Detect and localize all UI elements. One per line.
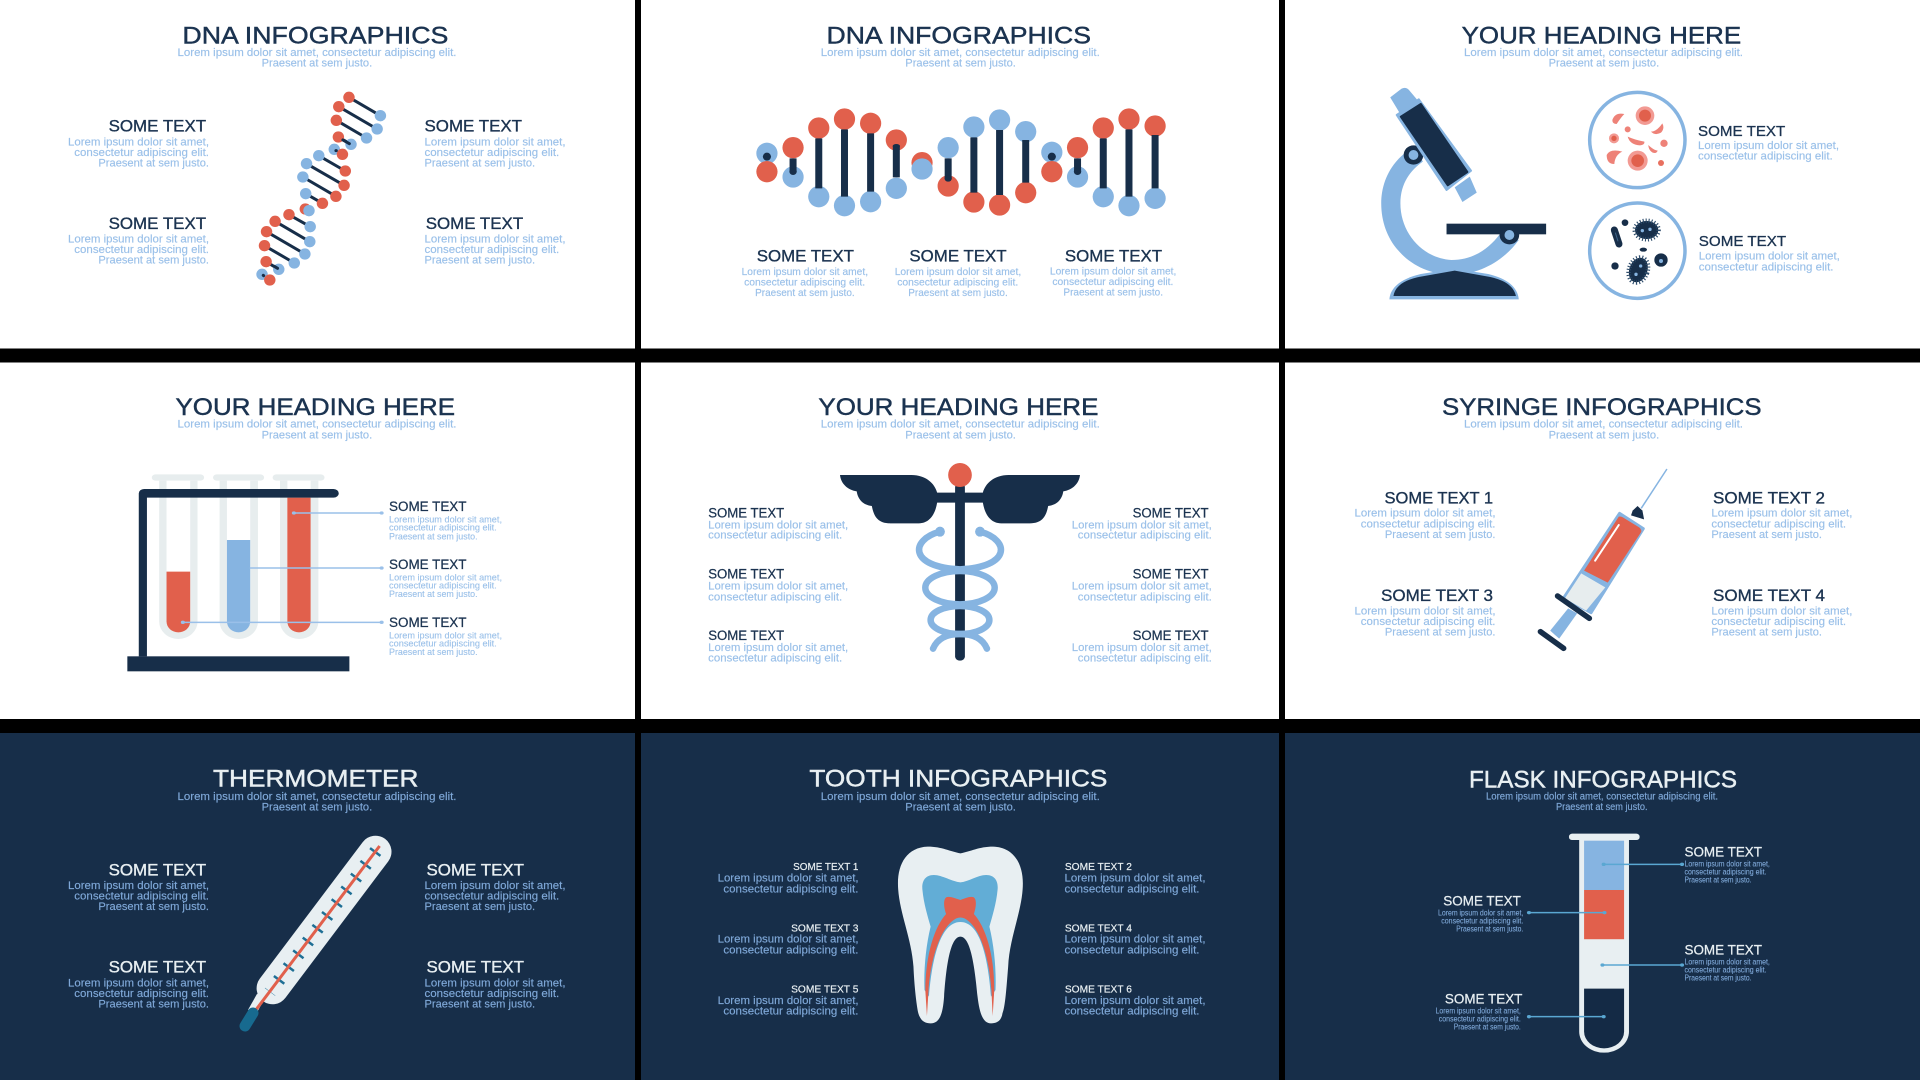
text block: column 1: [742, 246, 868, 299]
text block: second: Lorem ipsum dolor sit amet,: [389, 572, 502, 582]
text block: top left: consectetur adipiscing elit.: [74, 890, 209, 902]
text block: top left: Praesent at sem justo.: [98, 901, 209, 913]
text block: text 4: [1711, 586, 1852, 639]
subtitle: Praesent at sem justo.: [1556, 802, 1648, 813]
text block: column 2: consectetur adipiscing elit.: [897, 277, 1018, 289]
panel: caduceus: [641, 362, 1279, 719]
subtitle: [821, 47, 1100, 69]
text block: top left: SOME TEXT: [109, 117, 206, 136]
text block: right 2: [1072, 567, 1212, 603]
text block: upper right: [1684, 843, 1770, 884]
text block: first: [1698, 123, 1839, 162]
text block: text 3: [1354, 586, 1496, 639]
text block: first: consectetur adipiscing elit.: [1698, 150, 1833, 162]
text block: left 2: SOME TEXT: [708, 567, 784, 582]
text block: column 3: SOME TEXT: [1065, 247, 1162, 266]
text block: column 2: [895, 246, 1021, 299]
text block: top right: Lorem ipsum dolor sit amet,: [424, 880, 566, 892]
text block: third: Praesent at sem justo.: [389, 647, 478, 657]
text block: lower right: Lorem ipsum dolor sit amet,: [1684, 958, 1770, 967]
text block: text 5: SOME TEXT 5: [791, 984, 859, 996]
text block: upper left: Lorem ipsum dolor sit amet,: [1438, 909, 1523, 918]
text block: column 2: SOME TEXT: [909, 246, 1007, 265]
text block: text 3: Lorem ipsum dolor sit amet,: [1354, 605, 1496, 617]
panel: DNA diagonal: [0, 0, 635, 348]
text block: lower right: Praesent at sem justo.: [1684, 973, 1752, 982]
text block: column 3: [1050, 247, 1176, 298]
text block: upper right: Lorem ipsum dolor sit amet,: [1684, 860, 1770, 869]
text block: bottom left: Lorem ipsum dolor sit amet,: [68, 977, 209, 989]
text block: left 1: [708, 505, 848, 542]
text block: column 2: Lorem ipsum dolor sit amet,: [895, 266, 1021, 278]
text block: column 2: Praesent at sem justo.: [908, 287, 1008, 299]
text block: bottom right: consectetur adipiscing elit.: [424, 244, 559, 256]
icon: microscope: [1381, 88, 1546, 299]
text block: text 6: SOME TEXT 6: [1065, 984, 1132, 996]
text block: text 1: consectetur adipiscing elit.: [723, 883, 858, 895]
text block: top right: Lorem ipsum dolor sit amet,: [424, 136, 566, 148]
text block: text 4: Lorem ipsum dolor sit amet,: [1064, 934, 1206, 946]
text block: top right: [424, 117, 566, 169]
icon: test tube rack: [127, 474, 349, 671]
text block: right 1: consectetur adipiscing elit.: [1078, 530, 1212, 542]
text block: text 2: consectetur adipiscing elit.: [1711, 518, 1846, 530]
text block: text 4: Lorem ipsum dolor sit amet,: [1711, 605, 1852, 617]
text block: second: consectetur adipiscing elit.: [1699, 261, 1834, 273]
text block: top right: consectetur adipiscing elit.: [424, 147, 559, 159]
text block: left 3: [708, 628, 848, 665]
panel: test tubes: [0, 362, 635, 719]
heading: DNA INFOGRAPHICS: [826, 22, 1091, 49]
icon: blood cells circle: [1590, 92, 1685, 188]
text block: top right: Praesent at sem justo.: [424, 901, 535, 913]
subtitle: Lorem ipsum dolor sit amet, consectetur adipiscing elit.: [1486, 791, 1718, 802]
text block: text 1: SOME TEXT 1: [793, 861, 859, 873]
heading: TOOTH INFOGRAPHICS: [809, 766, 1107, 793]
subtitle: Praesent at sem justo.: [262, 801, 372, 813]
subtitle: Lorem ipsum dolor sit amet, consectetur adipiscing elit.: [1464, 47, 1743, 59]
text block: lower left: SOME TEXT: [1445, 990, 1523, 1006]
text block: text 1: [1354, 488, 1496, 541]
text block: first: Praesent at sem justo.: [389, 531, 478, 541]
text block: upper right: Praesent at sem justo.: [1684, 875, 1752, 884]
heading: SYRINGE INFOGRAPHICS: [1442, 394, 1762, 421]
text block: top left: consectetur adipiscing elit.: [74, 147, 209, 159]
text block: column 3: consectetur adipiscing elit.: [1052, 276, 1173, 288]
text block: left 3: SOME TEXT: [708, 628, 784, 643]
text block: text 1: Praesent at sem justo.: [1385, 529, 1496, 541]
icon: thermometer: [245, 846, 380, 1026]
text block: text 6: consectetur adipiscing elit.: [1064, 1006, 1200, 1018]
text block: text 5: [718, 984, 859, 1018]
diagonal DNA helix: [256, 92, 386, 286]
text block: upper right: SOME TEXT: [1684, 843, 1762, 859]
leader lines: [181, 511, 384, 624]
text block: lower left: Praesent at sem justo.: [1454, 1022, 1521, 1031]
text block: third: Lorem ipsum dolor sit amet,: [389, 630, 502, 640]
text block: first: Lorem ipsum dolor sit amet,: [389, 514, 502, 524]
text block: left 2: consectetur adipiscing elit.: [708, 591, 842, 603]
panel: DNA horizontal: [641, 0, 1279, 348]
text block: top left: Praesent at sem justo.: [98, 157, 209, 169]
leader lines: [1527, 863, 1684, 1018]
text block: text 4: Praesent at sem justo.: [1711, 627, 1822, 639]
text block: bottom left: SOME TEXT: [109, 214, 206, 233]
text block: text 3: SOME TEXT 3: [791, 922, 859, 934]
text block: third: consectetur adipiscing elit.: [389, 639, 497, 649]
text block: text 1: Lorem ipsum dolor sit amet,: [718, 872, 859, 884]
heading: YOUR HEADING HERE: [818, 394, 1098, 421]
text block: bottom right: Praesent at sem justo.: [424, 255, 535, 267]
text block: lower left: [1436, 990, 1523, 1031]
text block: text 4: SOME TEXT 4: [1065, 922, 1132, 934]
text block: top right: [424, 860, 566, 913]
text block: text 2: [1711, 488, 1852, 541]
panel: tooth: [641, 733, 1279, 1080]
subtitle: [178, 419, 456, 442]
text block: second: Praesent at sem justo.: [389, 589, 478, 599]
text block: second: [389, 557, 502, 599]
text block: text 4: consectetur adipiscing elit.: [1711, 616, 1846, 628]
heading: YOUR HEADING HERE: [1462, 22, 1741, 49]
text block: right 2: Lorem ipsum dolor sit amet,: [1072, 581, 1212, 593]
subtitle: Praesent at sem justo.: [905, 430, 1016, 442]
text block: column 1: Praesent at sem justo.: [755, 287, 855, 299]
text block: left 1: SOME TEXT: [708, 505, 784, 520]
text block: text 2: Lorem ipsum dolor sit amet,: [1064, 872, 1206, 884]
text block: lower right: SOME TEXT: [1684, 941, 1762, 957]
icon: bacteria circle: [1590, 203, 1685, 298]
text block: lower left: consectetur adipiscing elit.: [1439, 1015, 1521, 1024]
icon: syringe: [1540, 469, 1667, 648]
text block: text 2: [1064, 861, 1206, 895]
subtitle: [1464, 47, 1743, 69]
text block: text 2: Praesent at sem justo.: [1711, 529, 1822, 541]
icon: caduceus: [840, 463, 1080, 661]
text block: text 3: SOME TEXT 3: [1381, 586, 1493, 605]
text block: text 1: [718, 861, 859, 895]
subtitle: [821, 791, 1100, 813]
text block: first: Lorem ipsum dolor sit amet,: [1698, 140, 1839, 152]
text block: column 3: Lorem ipsum dolor sit amet,: [1050, 265, 1176, 277]
text block: top left: Lorem ipsum dolor sit amet,: [68, 880, 209, 892]
heading: YOUR HEADING HERE: [176, 394, 455, 421]
text block: second: SOME TEXT: [389, 557, 466, 572]
text block: lower right: consectetur adipiscing elit.: [1684, 965, 1766, 974]
text block: top left: [68, 860, 209, 913]
text block: upper left: Praesent at sem justo.: [1456, 924, 1523, 933]
text block: first: SOME TEXT: [1698, 123, 1785, 140]
text block: right 1: Lorem ipsum dolor sit amet,: [1072, 519, 1212, 531]
text block: text 1: Lorem ipsum dolor sit amet,: [1354, 508, 1496, 520]
subtitle: Lorem ipsum dolor sit amet, consectetur adipiscing elit.: [821, 419, 1100, 431]
text block: text 6: Lorem ipsum dolor sit amet,: [1064, 995, 1206, 1007]
text block: lower right: [1684, 941, 1770, 982]
text block: left 3: consectetur adipiscing elit.: [708, 653, 842, 665]
text block: right 3: consectetur adipiscing elit.: [1078, 653, 1212, 665]
subtitle: Lorem ipsum dolor sit amet, consectetur adipiscing elit.: [178, 791, 456, 803]
text block: first: SOME TEXT: [389, 499, 466, 514]
text block: column 1: Lorem ipsum dolor sit amet,: [742, 266, 868, 278]
text block: upper right: consectetur adipiscing elit.: [1684, 867, 1766, 876]
subtitle: Lorem ipsum dolor sit amet, consectetur adipiscing elit.: [178, 47, 456, 59]
text block: top left: SOME TEXT: [109, 860, 206, 879]
text block: column 1: SOME TEXT: [757, 246, 854, 265]
text block: bottom right: SOME TEXT: [426, 214, 523, 233]
text block: bottom left: [68, 958, 209, 1011]
subtitle: [821, 419, 1100, 442]
text block: bottom right: SOME TEXT: [426, 958, 524, 977]
text block: upper left: SOME TEXT: [1443, 892, 1521, 908]
subtitle: Lorem ipsum dolor sit amet, consectetur adipiscing elit.: [821, 47, 1100, 59]
text block: upper left: [1438, 892, 1523, 933]
text block: text 2: consectetur adipiscing elit.: [1064, 883, 1200, 895]
text block: bottom left: Praesent at sem justo.: [98, 999, 209, 1011]
heading: THERMOMETER: [213, 766, 418, 793]
text block: second: SOME TEXT: [1699, 233, 1786, 250]
text block: top right: SOME TEXT: [424, 117, 522, 136]
text block: bottom left: consectetur adipiscing elit.: [74, 244, 209, 256]
text block: text 4: SOME TEXT 4: [1713, 586, 1825, 605]
text block: lower left: Lorem ipsum dolor sit amet,: [1436, 1007, 1521, 1016]
subtitle: [1486, 791, 1718, 813]
text block: left 2: Lorem ipsum dolor sit amet,: [708, 581, 848, 593]
subtitle: Lorem ipsum dolor sit amet, consectetur adipiscing elit.: [1464, 419, 1743, 431]
text block: text 6: [1064, 984, 1206, 1018]
text block: text 5: Lorem ipsum dolor sit amet,: [718, 995, 859, 1007]
text block: text 3: consectetur adipiscing elit.: [1361, 616, 1496, 628]
text block: third: SOME TEXT: [389, 615, 466, 630]
subtitle: Praesent at sem justo.: [262, 57, 372, 69]
subtitle: Lorem ipsum dolor sit amet, consectetur adipiscing elit.: [821, 791, 1100, 803]
text block: bottom right: [424, 958, 566, 1011]
text block: top left: Lorem ipsum dolor sit amet,: [68, 136, 209, 148]
text block: text 1: consectetur adipiscing elit.: [1361, 518, 1496, 530]
panel: flask: [1285, 733, 1920, 1080]
subtitle: Lorem ipsum dolor sit amet, consectetur adipiscing elit.: [178, 419, 456, 431]
text block: text 2: SOME TEXT 2: [1065, 861, 1132, 873]
text block: second: [1699, 233, 1840, 273]
text block: column 1: consectetur adipiscing elit.: [744, 277, 865, 289]
text block: right 2: SOME TEXT: [1133, 567, 1209, 582]
icon: flask tube: [1569, 834, 1640, 1053]
text block: bottom left: Lorem ipsum dolor sit amet,: [68, 234, 209, 246]
text block: left 3: Lorem ipsum dolor sit amet,: [708, 642, 848, 654]
subtitle: [1464, 419, 1743, 442]
text block: right 3: Lorem ipsum dolor sit amet,: [1072, 642, 1212, 654]
panel: microscope: [1285, 0, 1920, 348]
text block: text 3: consectetur adipiscing elit.: [723, 944, 858, 956]
text block: text 4: consectetur adipiscing elit.: [1064, 944, 1200, 956]
text block: column 3: Praesent at sem justo.: [1063, 286, 1163, 298]
panel: thermometer: [0, 733, 635, 1080]
icon: tooth: [898, 847, 1023, 1023]
text block: bottom right: Lorem ipsum dolor sit amet,: [424, 234, 566, 246]
horizontal DNA helix: [756, 108, 1166, 216]
text block: upper left: consectetur adipiscing elit.: [1441, 916, 1523, 926]
heading: FLASK INFOGRAPHICS: [1469, 767, 1737, 794]
text block: text 4: [1064, 922, 1206, 956]
text block: bottom left: [68, 214, 209, 267]
text block: second: Lorem ipsum dolor sit amet,: [1699, 251, 1840, 263]
subtitle: Praesent at sem justo.: [905, 57, 1016, 69]
text block: third: [389, 615, 502, 657]
subtitle: Praesent at sem justo.: [905, 801, 1016, 813]
text block: text 5: consectetur adipiscing elit.: [723, 1006, 858, 1018]
heading: DNA INFOGRAPHICS: [182, 22, 448, 49]
text block: right 3: SOME TEXT: [1133, 628, 1209, 643]
text block: top right: Praesent at sem justo.: [424, 157, 535, 169]
text block: top right: SOME TEXT: [426, 860, 524, 879]
subtitle: Praesent at sem justo.: [1549, 430, 1659, 442]
text block: top left: [68, 117, 209, 169]
text block: bottom left: Praesent at sem justo.: [98, 255, 209, 267]
text block: text 1: SOME TEXT 1: [1384, 488, 1493, 507]
text block: right 1: [1072, 505, 1212, 542]
text block: left 1: Lorem ipsum dolor sit amet,: [708, 519, 848, 531]
text block: bottom left: consectetur adipiscing elit.: [74, 988, 209, 1000]
text block: bottom left: SOME TEXT: [109, 958, 206, 977]
text block: first: [389, 499, 502, 541]
text block: text 2: Lorem ipsum dolor sit amet,: [1711, 508, 1852, 520]
text block: text 3: Lorem ipsum dolor sit amet,: [718, 934, 859, 946]
subtitle: [178, 791, 456, 813]
text block: right 3: [1072, 628, 1212, 665]
text block: left 2: [708, 567, 848, 603]
text block: second: consectetur adipiscing elit.: [389, 581, 497, 591]
subtitle: [178, 47, 456, 69]
text block: bottom right: [424, 214, 566, 267]
text block: right 2: consectetur adipiscing elit.: [1078, 591, 1212, 603]
text block: text 3: Praesent at sem justo.: [1385, 627, 1496, 639]
text block: first: consectetur adipiscing elit.: [389, 523, 497, 533]
subtitle: Praesent at sem justo.: [1549, 57, 1659, 69]
text block: bottom right: Praesent at sem justo.: [424, 999, 535, 1011]
panel: syringe: [1285, 362, 1920, 719]
text block: left 1: consectetur adipiscing elit.: [708, 530, 842, 542]
text block: bottom right: Lorem ipsum dolor sit amet,: [424, 977, 566, 989]
text block: right 1: SOME TEXT: [1133, 505, 1209, 520]
text block: text 3: [718, 922, 859, 956]
text block: top right: consectetur adipiscing elit.: [424, 890, 559, 902]
text block: bottom right: consectetur adipiscing elit.: [424, 988, 559, 1000]
text block: text 2: SOME TEXT 2: [1713, 488, 1825, 507]
subtitle: Praesent at sem justo.: [262, 430, 372, 442]
